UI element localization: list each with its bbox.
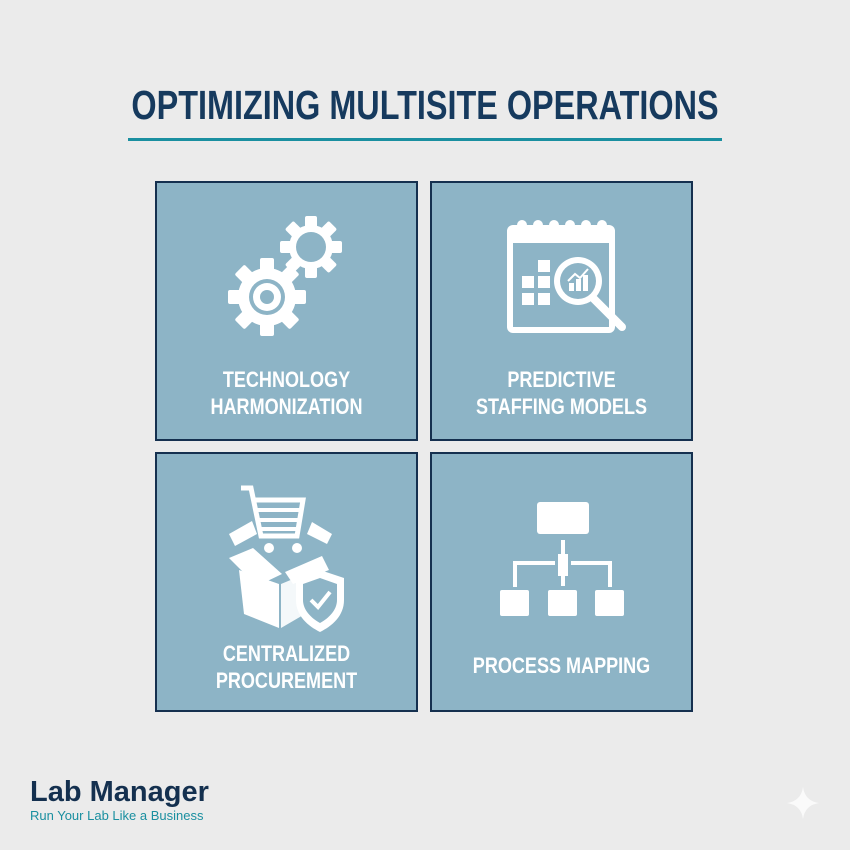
label: CENTRALIZED	[223, 641, 350, 666]
label: PROCUREMENT	[216, 668, 357, 693]
brand logo: Run Your Lab Like a Business	[30, 808, 203, 823]
label: TECHNOLOGY	[223, 367, 350, 392]
title: OPTIMIZING MULTISITE OPERATIONS	[131, 82, 719, 128]
label: PROCESS MAPPING	[473, 653, 650, 678]
icon: flowchart	[500, 502, 624, 616]
label: STAFFING MODELS	[476, 394, 647, 419]
panel: predictive staffing models	[430, 181, 693, 441]
icon: cart, box, shield	[229, 486, 344, 632]
brand logo	[30, 776, 209, 823]
panel: technology harmonization	[155, 181, 418, 441]
title underline	[128, 138, 722, 141]
label	[476, 367, 647, 419]
panel: centralized procurement	[155, 452, 418, 712]
label	[210, 367, 362, 419]
panel: process mapping	[430, 452, 693, 712]
label: PREDICTIVE	[507, 367, 616, 392]
icon: gears	[228, 216, 342, 336]
label: HARMONIZATION	[210, 394, 362, 419]
brand logo: Lab Manager	[30, 776, 209, 808]
label	[216, 641, 357, 693]
icon: calendar with magnifier	[507, 220, 626, 333]
icon: sparkle	[788, 788, 818, 818]
